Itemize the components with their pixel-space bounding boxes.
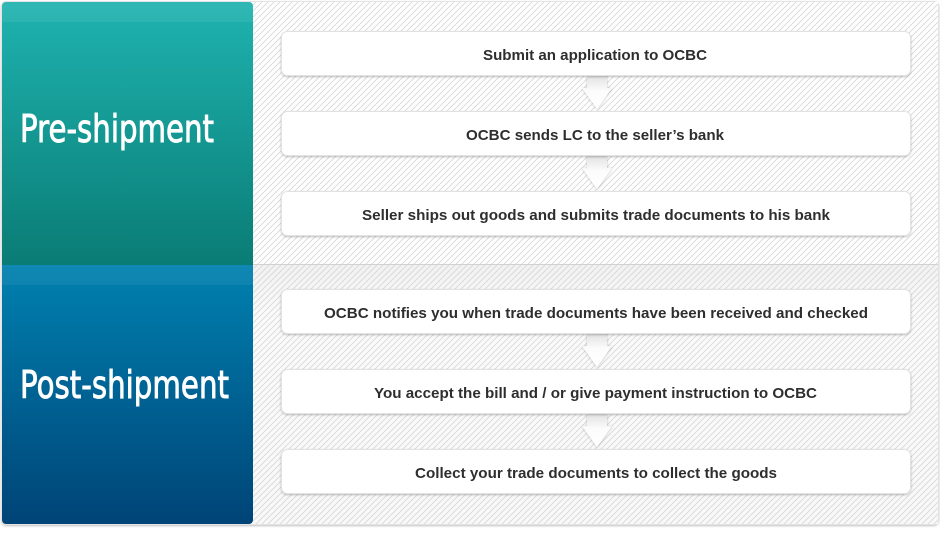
- step: OCBC sends LC: [282, 112, 910, 156]
- panel: post-shipment heading block: [2, 265, 253, 524]
- step: Submit an application: Submit an application to OCBC: [483, 47, 707, 64]
- arrow: step 1 to 2: [582, 76, 612, 109]
- panel: post-shipment steps background: [253, 264, 938, 524]
- arrow: step 5 to 6: [582, 414, 612, 447]
- step: OCBC notifies: [282, 290, 910, 334]
- panel: pre-shipment steps background: [253, 2, 938, 264]
- step: Submit an application: [282, 32, 910, 76]
- heading: Pre-shipment: Pre-shipment: [20, 107, 214, 151]
- step: accept the bill: You accept the bill and / or give payment instruction to OCBC: [374, 385, 817, 402]
- step: collect documents: [282, 450, 910, 494]
- arrow: step 2 to 3: [582, 156, 612, 189]
- step: OCBC sends LC: OCBC sends LC to the seller’s bank: [466, 127, 725, 144]
- heading: Post-shipment: Post-shipment: [20, 363, 229, 407]
- step: collect documents: Collect your trade documents to collect the goods: [415, 465, 777, 482]
- arrow: step 4 to 5: [582, 334, 612, 367]
- step: Seller ships goods: [282, 192, 910, 236]
- step: Seller ships goods: Seller ships out goods and submits trade documents to his bank: [362, 207, 831, 224]
- step: OCBC notifies: OCBC notifies you when trade documents have been received and checked: [324, 305, 868, 322]
- panel: pre-shipment heading block: [2, 2, 253, 265]
- step: accept the bill: [282, 370, 910, 414]
